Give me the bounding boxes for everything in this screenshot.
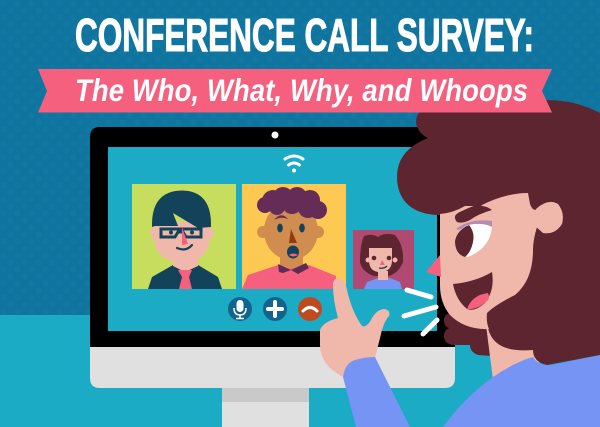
ears <box>150 227 162 239</box>
curly hair <box>257 187 327 219</box>
video tile: surprised person <box>242 184 346 289</box>
neck <box>280 252 303 268</box>
woman in foreground <box>320 100 600 427</box>
neck <box>486 320 540 380</box>
mouth <box>287 246 299 258</box>
collar <box>278 263 309 274</box>
eyebrow <box>455 205 492 223</box>
eye white <box>455 224 492 257</box>
shoulders <box>364 278 402 289</box>
glasses <box>161 229 201 237</box>
shirt <box>242 265 337 289</box>
lower curls <box>444 313 495 356</box>
button: microphone <box>228 297 252 321</box>
video tile: man with glasses <box>132 184 236 289</box>
floor <box>0 315 600 427</box>
background wall <box>0 0 600 316</box>
eyes <box>169 230 173 234</box>
ears <box>366 258 370 262</box>
eyelid <box>456 220 492 230</box>
nose <box>426 255 441 277</box>
nose <box>182 227 188 245</box>
mouth <box>177 245 192 249</box>
hand <box>320 278 390 377</box>
monitor base bezel <box>90 340 455 388</box>
smile <box>379 266 387 268</box>
face <box>264 202 318 260</box>
pupil <box>455 225 474 257</box>
subtitle: The Who, What, Why, and Whoops <box>75 73 528 108</box>
hair <box>152 190 211 228</box>
tie <box>178 270 192 289</box>
speech lines <box>404 290 437 334</box>
ear <box>535 202 563 233</box>
eyebrow <box>274 215 288 220</box>
wifi icon <box>285 156 303 172</box>
eyes <box>372 256 376 260</box>
face <box>440 193 543 329</box>
face <box>369 248 392 272</box>
monitor frame <box>90 127 455 347</box>
sleeve <box>343 357 410 427</box>
face <box>154 222 210 262</box>
nose <box>289 229 297 243</box>
monitor <box>90 127 455 427</box>
monitor stand <box>222 388 309 402</box>
sweater <box>443 355 600 427</box>
ribbon banner <box>38 69 552 112</box>
nose <box>380 260 385 265</box>
video tile: self view <box>353 230 414 289</box>
screen <box>108 147 437 331</box>
mouth <box>453 272 493 310</box>
button: add <box>263 297 287 321</box>
tongue <box>467 293 489 309</box>
camera dot <box>272 132 278 138</box>
neck <box>378 271 388 280</box>
neck <box>173 252 198 272</box>
hair <box>397 100 600 365</box>
hair <box>360 234 403 276</box>
ears <box>257 226 269 238</box>
eyes <box>277 224 283 232</box>
button: hang up <box>298 297 322 321</box>
suit <box>148 265 222 289</box>
